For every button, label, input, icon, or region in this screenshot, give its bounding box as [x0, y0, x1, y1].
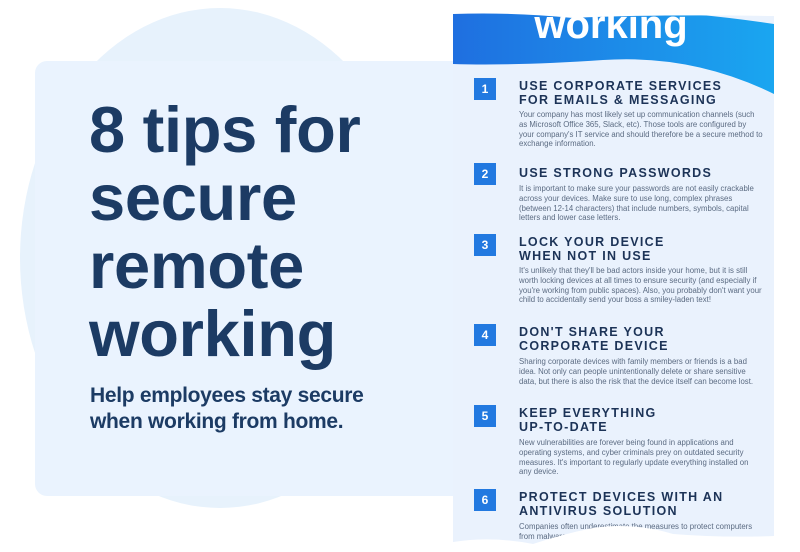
subtitle: when working from home.	[90, 410, 343, 433]
document preview: 3	[482, 238, 488, 252]
document preview: It is important to make sure your passwords are not easily crackable across your devices. Make sure to use long, complex phrases (between 12-14 characters) that include numbers, symbols, capital letters and lower case letters.	[519, 184, 754, 222]
document preview: 1	[482, 82, 488, 96]
title: secure	[89, 161, 297, 234]
title: 8 tips for	[89, 93, 360, 166]
document preview: WHEN NOT IN USE	[519, 249, 652, 263]
document preview: 5	[482, 409, 488, 423]
document preview: DON'T SHARE YOUR	[519, 325, 665, 339]
torn bottom edge	[453, 526, 774, 548]
tip 5	[474, 405, 748, 476]
document preview: Your company has most likely set up communication channels (such as Microsoft Office 365, Slack, etc). Those tools are configured by your company's IT service and should therefore be a secure method to exchange information.	[519, 110, 763, 148]
document preview: FOR EMAILS & MESSAGING	[519, 93, 717, 107]
title card	[35, 61, 475, 496]
document preview: ANTIVIRUS SOLUTION	[519, 504, 678, 518]
tip 2	[474, 163, 754, 222]
tip 6	[474, 489, 752, 541]
document preview	[453, 4, 774, 548]
title	[88, 93, 360, 370]
document header	[453, 4, 774, 94]
document preview: USE CORPORATE SERVICES	[519, 79, 722, 93]
document preview: CORPORATE DEVICE	[519, 339, 669, 353]
tip 3	[474, 234, 762, 304]
subtitle: Help employees stay secure	[90, 384, 364, 407]
document preview: LOCK YOUR DEVICE	[519, 235, 665, 249]
document preview: PROTECT DEVICES WITH AN	[519, 490, 723, 504]
document preview: USE STRONG PASSWORDS	[519, 166, 712, 180]
document header: working	[533, 4, 688, 47]
title: remote	[89, 229, 304, 302]
document preview: Sharing corporate devices with family members or friends is a bad idea. Not only can people unintentionally delete or share sensitive data, but there is also the risk that the device itself can become lost.	[519, 357, 753, 386]
document preview: 2	[482, 167, 488, 181]
subtitle	[90, 384, 364, 433]
tip 1	[474, 78, 763, 148]
document preview: New vulnerabilities are forever being found in applications and operating systems, and cyber criminals prey on outdated security measures. It's important to regularly update everything installed on any device.	[519, 438, 748, 476]
document preview: It's unlikely that they'll be bad actors inside your home, but it is still worth locking devices at all times to ensure security (and especially if you're working from public spaces). Also, you probably don't want your child to accidentally send your boss a smiley-laden text!	[519, 266, 762, 304]
background blob	[20, 8, 420, 508]
document preview: KEEP EVERYTHING	[519, 406, 657, 420]
title: working	[89, 297, 336, 370]
document preview: 4	[482, 328, 488, 342]
document preview: Companies often underestimate the measures to protect computers from malware. It's important that you install...	[519, 522, 752, 541]
tip 4	[474, 324, 753, 386]
document preview: UP-TO-DATE	[519, 420, 608, 434]
document preview: 6	[482, 493, 488, 507]
